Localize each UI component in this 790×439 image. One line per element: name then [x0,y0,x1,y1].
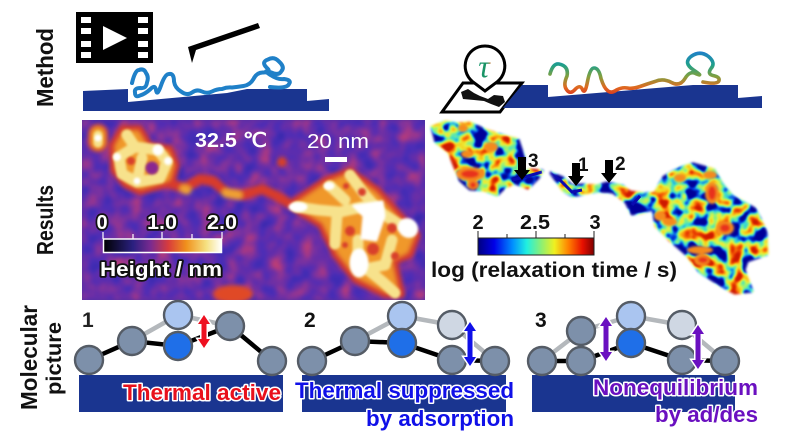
label: temperature: 32.5 ℃ [195,130,267,152]
panel: molecular picture 2 [295,302,514,431]
label: Molecular picture: Molecular [16,305,42,410]
arrow: marker 2: 2 [615,154,626,175]
legend: relaxation time color bar: 2.5 [520,212,550,234]
afm: molecule halo and orange body [98,128,418,295]
diagram: substrate with colored polymer chain [503,53,762,108]
arrow: marker 3: 3 [528,151,539,172]
map: orange and red patches [455,124,734,266]
arrow: purple left [600,317,612,361]
label: scale bar 20 nm [307,131,369,162]
arrow: marker 1: 1 [578,155,589,176]
arrow: marker 1 [568,155,589,186]
number 3: 3 [535,309,547,332]
afm: dark holes [127,157,399,260]
legend: height color bar: 1.0 [147,212,177,234]
icon: tau magnifier over map: τ [478,48,491,84]
caption: nonequilibrium by ad/des: Nonequilibrium [593,375,758,400]
label: Results: Results [32,185,58,255]
label: Method: Method [32,28,58,107]
afm: spots outside molecule [213,157,287,303]
arrow: marker 2 [601,154,626,183]
number 2: 2 [304,309,316,332]
arrow: blue suppressed motion [464,322,476,366]
arrow: purple right [692,325,704,369]
legend: height color bar [96,212,237,281]
label: Molecular picture [16,305,66,410]
afm: yellow ridges [98,135,400,293]
caption: thermal suppressed by adsorption: by adsorption [366,406,514,431]
panel: molecular picture 3 [528,302,758,427]
caption: thermal active: Thermal active [123,380,281,405]
legend: height color bar: 2.0 [207,212,237,234]
legend: relaxation time color bar: log (relaxation time / s) [431,259,677,282]
caption: nonequilibrium by ad/des: by ad/des [655,402,758,427]
caption: thermal suppressed by adsorption: Thermal suppressed [295,378,514,403]
number 1: 1 [82,309,94,332]
map: dark blue filaments [512,172,640,205]
legend: height color bar: 0 [96,212,108,234]
caption: nonequilibrium by ad/des [593,375,758,427]
diagram: substrate with blue polymer chain [83,58,329,111]
panel: molecular picture 1 [75,301,286,412]
legend: height color bar: Height / nm [100,259,222,281]
arrow: red thermal motion [198,315,210,348]
legend: relaxation time color bar: 2 [472,212,484,234]
label: Molecular picture: picture [43,322,66,395]
legend: relaxation time color bar: 3 [589,212,601,234]
arrow: marker 3 [514,151,539,180]
afm: white peaks [95,135,421,277]
icon: video film strip [76,12,153,63]
legend: relaxation time color bar [431,212,677,282]
icon: tau magnifier over map [442,46,522,112]
panel: AFM height image [82,120,425,303]
icon: AFM cantilever [188,23,260,63]
caption: thermal suppressed by adsorption [295,378,514,431]
label: scale bar 20 nm: 20 nm [307,131,369,153]
panel: relaxation time map [425,118,775,298]
